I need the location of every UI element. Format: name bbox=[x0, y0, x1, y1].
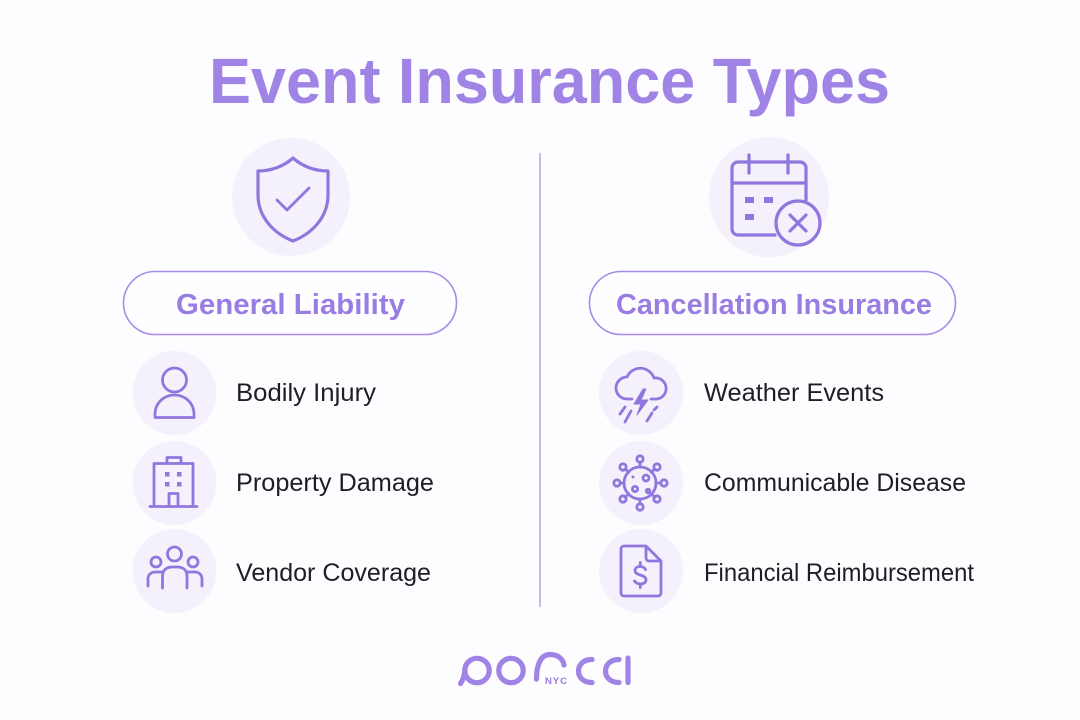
item: financial reimbursement: Financial Reimbursement bbox=[704, 559, 974, 587]
item: bodily injury bbox=[132, 351, 377, 435]
heading: cancellation insurance bbox=[590, 272, 956, 334]
item: financial reimbursement bbox=[599, 529, 974, 613]
heading: cancellation insurance: Cancellation Insurance bbox=[616, 289, 932, 321]
item: property damage: Property Damage bbox=[236, 469, 434, 497]
logo bbox=[460, 654, 628, 687]
panel: general liability bbox=[124, 138, 456, 613]
item: vendor coverage bbox=[132, 529, 431, 613]
heading: general liability: General Liability bbox=[176, 289, 405, 321]
item: weather events bbox=[599, 351, 884, 435]
item: weather events: Weather Events bbox=[704, 379, 884, 407]
item: communicable disease: Communicable Disease bbox=[704, 469, 966, 497]
logo: NYC bbox=[545, 676, 567, 687]
icon: shield with check bbox=[232, 138, 350, 256]
item: bodily injury: Bodily Injury bbox=[236, 379, 377, 407]
icon: calendar with x bbox=[709, 137, 829, 257]
item: vendor coverage: Vendor Coverage bbox=[236, 559, 431, 587]
heading: general liability bbox=[124, 272, 456, 334]
item: communicable disease bbox=[599, 441, 966, 525]
title: Event Insurance Types bbox=[209, 45, 890, 117]
item: property damage bbox=[132, 441, 434, 525]
panel: cancellation insurance bbox=[590, 137, 974, 613]
